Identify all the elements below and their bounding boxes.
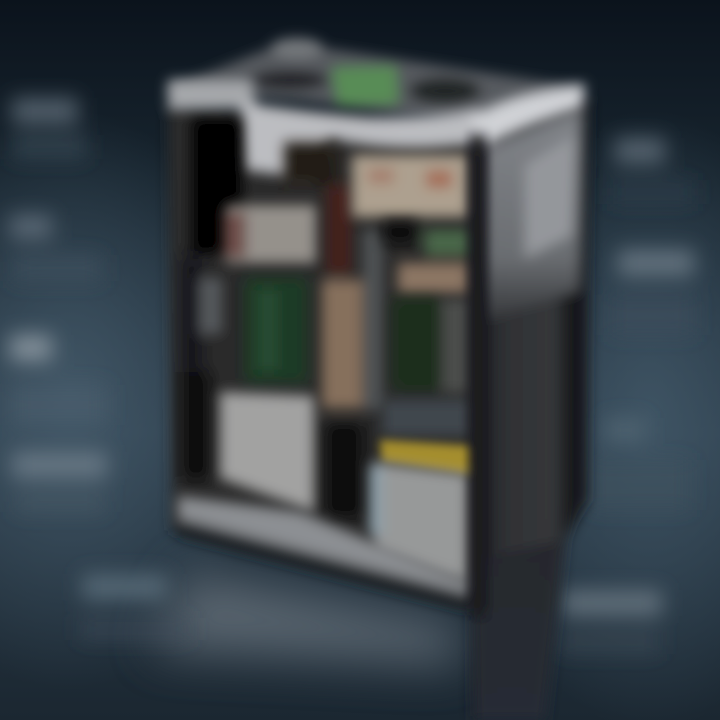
green circuit board left [245, 278, 307, 383]
green circuit board right [383, 298, 469, 436]
right side panel [470, 95, 590, 720]
bottom label placeholders [80, 574, 662, 654]
left black column [182, 118, 242, 480]
central copper column [322, 185, 383, 518]
right middle module [383, 220, 469, 293]
lower left white panel [220, 392, 314, 512]
right dark edge [470, 135, 486, 615]
orange top right module [352, 155, 468, 217]
top face [165, 38, 585, 125]
front case frame [168, 105, 478, 610]
left label placeholders [10, 98, 107, 512]
white top rim [168, 80, 585, 178]
yellow strip [380, 440, 472, 476]
bottom plinth [178, 496, 470, 610]
computer tower [165, 38, 590, 720]
upper left drive bay [224, 142, 336, 263]
lower right white panel [370, 462, 468, 584]
right label placeholders [590, 138, 695, 510]
